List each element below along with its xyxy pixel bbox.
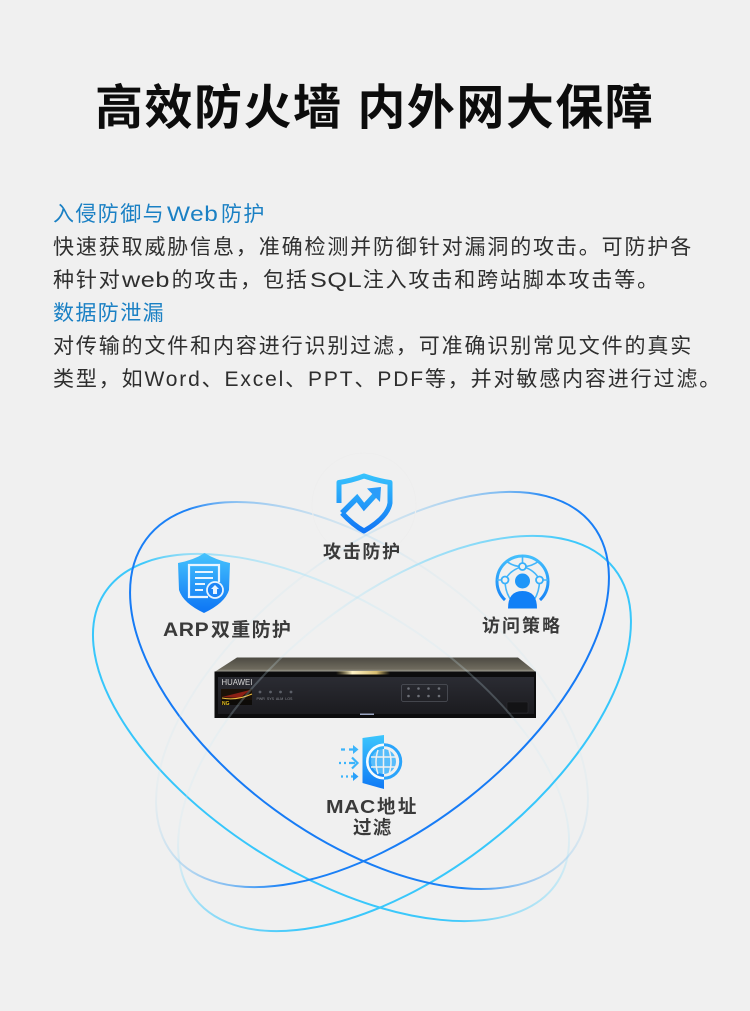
orbit ring: light cyan tilted up-right <box>109 460 700 1007</box>
section heading: data leak prevention: 数据防泄漏 <box>53 302 165 325</box>
text block: data leak prevention description: 对传输的文件和内容进行识别过滤，可准确识别常见文件的真实 <box>53 335 693 358</box>
firewall device: NG <box>222 701 230 707</box>
label: access policy: 访问策略 <box>482 616 562 636</box>
device logo: HUAWEI <box>222 678 252 687</box>
orbit ring: blue tilted down-right <box>62 425 656 966</box>
text block: intrusion prevention description: web <box>122 269 170 292</box>
label: ARP dual protection: 双重防护 <box>211 620 292 641</box>
label: MAC address filtering: 地址 <box>377 796 419 817</box>
section heading: intrusion prevention: 入侵防御与 防护 <box>53 203 266 226</box>
status LEDs <box>259 691 292 693</box>
text block: intrusion prevention description: 种针对 的攻击，包括 注入攻击和跨站脚本攻击等。 <box>53 269 660 292</box>
text block: intrusion prevention description: SQL <box>310 269 362 292</box>
orbit ring: blue tilted up-right <box>87 416 678 963</box>
label: MAC address filtering: MAC <box>326 796 376 817</box>
text block: data leak prevention description <box>53 335 722 391</box>
icon: ARP protection shield <box>178 553 230 613</box>
icon: MAC filter door and globe <box>339 735 401 789</box>
orbit ring: light cyan tilted down-right <box>32 480 630 995</box>
icon: attack protection shield <box>312 453 416 557</box>
firewall device: PWR SYS ALM LOS <box>256 697 293 701</box>
icon: access policy globe and user <box>497 555 548 608</box>
section heading: intrusion prevention: Web <box>167 203 218 226</box>
text block: data leak prevention description: 类型，如Word、Excel、PPT、PDF等，并对敏感内容进行过滤。 <box>53 368 722 391</box>
text block: intrusion prevention description <box>53 236 693 292</box>
title: 高效防火墙 内外网大保障 <box>95 82 654 135</box>
port panel <box>402 684 448 702</box>
label: attack protection: 攻击防护 <box>323 542 402 562</box>
label: MAC address filtering <box>326 796 419 838</box>
label: ARP dual protection: ARP <box>163 620 209 641</box>
text block: intrusion prevention description: 快速获取威胁信息，准确检测并防御针对漏洞的攻击。可防护各 <box>53 236 693 259</box>
label: MAC address filtering: 过滤 <box>353 817 392 838</box>
firewall device <box>214 658 536 718</box>
label: ARP dual protection <box>163 620 292 641</box>
